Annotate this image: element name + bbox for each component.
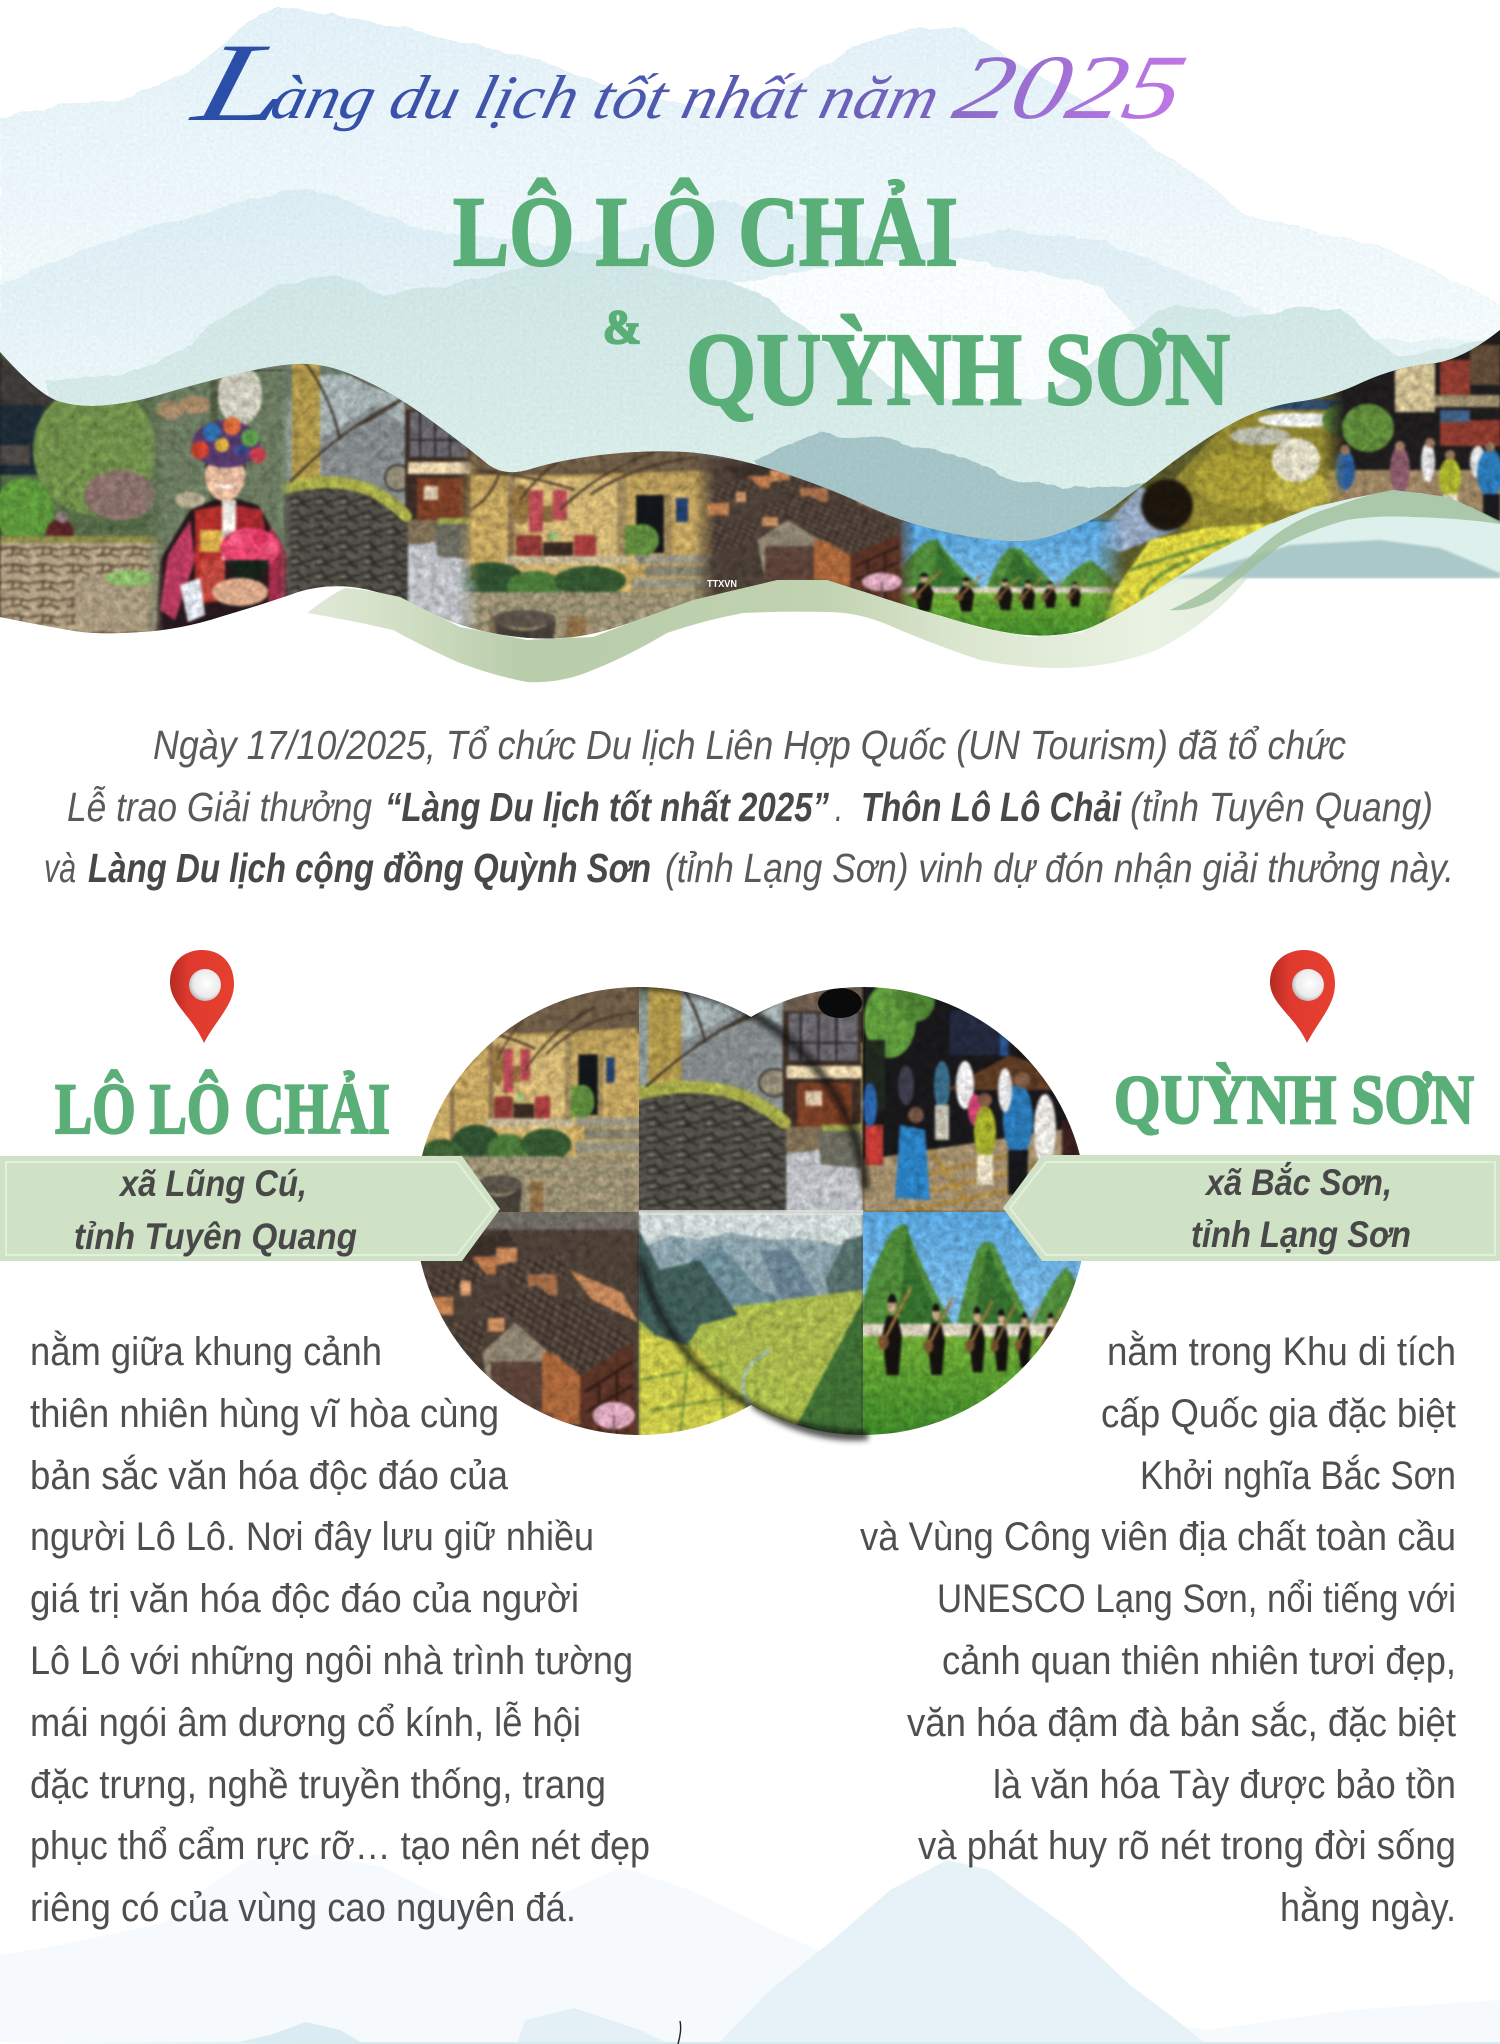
left column body text: đặc trưng, nghề truyền thống, trang [30,1763,606,1807]
quadrant: stone wall lane [639,987,863,1212]
headline script: Làng du lịch tốt nhất năm 2025: 2025 [945,37,1195,139]
drop shadow of overlapping circles [752,1396,868,1441]
quadrant: tiled rooftops [420,1212,639,1435]
left column body text [30,1329,650,1930]
right column body text: là văn hóa Tày được bảo tồn [993,1763,1456,1807]
right column body text: cấp Quốc gia đặc biệt [1101,1392,1456,1436]
quadrant: earthen house [422,987,639,1212]
photo: stone wall and cafe lane [281,364,541,638]
lower right green stripe [1170,490,1500,610]
right column body text: và Vùng Công viên địa chất toàn cầu [860,1515,1456,1559]
main title: Lô Lô Chải: LÔ LÔ CHẢI [453,176,958,287]
main title: Quỳnh Sơn: QUỲNH SƠN [686,312,1230,427]
green wave ribbon under the photos [307,490,1500,682]
photo: musicians in rice field [898,518,1126,636]
right column body text: nằm trong Khu di tích [1107,1329,1456,1374]
quadrant: karst valley with rice fields [639,1212,863,1438]
right column body text: Khởi nghĩa Bắc Sơn [1140,1453,1456,1498]
photo credit: TTXVN [707,579,737,590]
intro paragraph: Ngày 17/10/2025, Tổ chức Du lịch Liên Hợp Quốc (UN Tourism) đã tổ chức [153,722,1346,768]
intro paragraph: Lễ trao Giải thưởng [67,784,372,830]
left column body text: nằm giữa khung cảnh [30,1329,382,1374]
left column body text: phục thổ cẩm rực rỡ… tạo nên nét đẹp [30,1824,650,1868]
intro paragraph: “Làng Du lịch tốt nhất 2025” [385,784,829,830]
right location pin [1270,950,1335,1043]
right address text: tỉnh Lạng Sơn [1191,1214,1411,1255]
left address ribbon [0,1156,500,1261]
quadrant: night bamboo dance [863,978,1091,1212]
left address text [74,1163,357,1257]
left column body text: người Lô Lô. Nơi đây lưu giữ nhiều [30,1515,594,1559]
intro paragraph: . [835,784,843,830]
intro paragraph: Thôn Lô Lô Chải [861,784,1122,830]
intro paragraph: và [44,845,76,891]
photo: woman in traditional Lo Lo costume [145,365,295,640]
left column body text: bản sắc văn hóa độc đáo của [30,1453,509,1498]
intro paragraph: (tỉnh Tuyên Quang) [1130,784,1433,830]
photo: community bamboo dance [1320,330,1500,530]
intro paragraph [44,722,1454,891]
left heading: Lô Lô Chải: LÔ LÔ CHẢI [55,1069,390,1149]
main title ampersand: & [603,301,641,354]
right column body text: cảnh quan thiên nhiên tươi đẹp, [942,1639,1456,1683]
right column body text: hằng ngày. [1280,1885,1456,1930]
right column body text [860,1329,1456,1930]
left column body text: giá trị văn hóa độc đáo của người [30,1577,579,1621]
lower right distant mountain [1175,540,1500,578]
left address text: tỉnh Tuyên Quang [74,1216,357,1257]
quadrant: musicians in rice field [863,1212,1082,1435]
right column body text: và phát huy rõ nét trong đời sống [918,1824,1456,1868]
circular photo collage [402,938,1103,1462]
right column body text: văn hóa đậm đà bản sắc, đặc biệt [907,1700,1456,1745]
headline script: Làng du lịch tốt nhất năm 2025: àng du lịch tốt nhất năm [265,63,947,132]
right address text: xã Bắc Sơn, [1204,1161,1392,1203]
left address text: xã Lũng Cú, [118,1163,307,1204]
shaded arcs where circles overlap [639,985,866,1190]
right address text [1191,1161,1411,1255]
left column body text: Lô Lô với những ngôi nhà trình tường [30,1639,633,1683]
photo band: village collage [0,330,1500,662]
right address ribbon [1003,1155,1500,1261]
photo: tiled rooftops [694,454,916,608]
background watercolor mountains, top [0,7,1500,570]
photo: valley with rice terraces [1096,389,1350,623]
left column body text: riêng có của vùng cao nguyên đá. [30,1886,576,1930]
left location pin [170,950,234,1043]
background watercolor mountains, bottom [0,1855,1500,2044]
photo: traditional earthen house [459,444,736,638]
lower right mint wash [1140,490,1500,602]
headline script: Làng du lịch tốt nhất năm 2025 [181,21,1195,145]
photo: stone garden [0,340,165,640]
headline script: Làng du lịch tốt nhất năm 2025: L [181,21,305,145]
left column body text: thiên nhiên hùng vĩ hòa cùng [30,1392,499,1436]
left column body text: mái ngói âm dương cổ kính, lễ hội [30,1700,581,1745]
intro paragraph: Làng Du lịch cộng đồng Quỳnh Sơn [88,845,651,891]
